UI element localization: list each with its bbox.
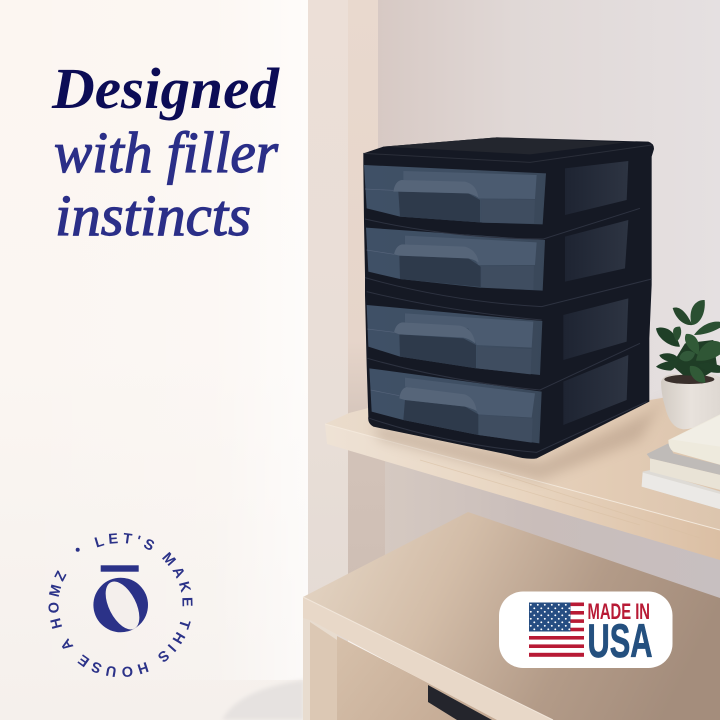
side window 2	[565, 220, 628, 282]
circular slogan: LET'S MAKE THIS HOUSE A HOMZ	[48, 532, 192, 677]
side window 3	[563, 298, 628, 360]
bottom book	[642, 470, 720, 509]
curtain base shape	[222, 680, 304, 720]
title line 2: with filler	[54, 120, 278, 185]
usa text: USA	[588, 614, 652, 667]
logo ring	[93, 578, 148, 632]
top book	[668, 414, 720, 465]
background: back wall	[378, 0, 720, 480]
title line 3: instincts	[55, 183, 251, 248]
logo bar	[101, 565, 139, 572]
desk front edge	[303, 597, 553, 720]
desk	[303, 512, 720, 720]
logo badge	[48, 532, 192, 677]
desk top surface	[303, 512, 720, 720]
drawer unit shadow	[372, 395, 666, 480]
drawer 2	[366, 228, 545, 291]
badge background	[499, 592, 672, 668]
side window 4	[563, 355, 628, 425]
drawer 1	[364, 165, 546, 224]
background: curtain fold left	[306, 0, 348, 720]
drawer rails	[365, 208, 652, 452]
plant pot	[661, 374, 720, 429]
desk inner cavity	[337, 636, 500, 720]
drawer 4	[369, 368, 542, 443]
plant leaves	[656, 300, 720, 383]
cabinet frame	[363, 137, 654, 459]
american flag	[529, 602, 584, 657]
shelf	[325, 388, 720, 560]
side window 1	[565, 161, 628, 215]
made in usa badge	[499, 592, 672, 668]
cabinet lid	[383, 137, 627, 154]
drawer handle	[428, 685, 492, 720]
made in text: MADE IN	[588, 599, 650, 624]
drawer 3	[367, 305, 542, 375]
middle book	[647, 443, 720, 475]
title	[51, 56, 280, 248]
title line 1: Designed	[51, 56, 280, 121]
background: curtain fold right	[340, 0, 385, 620]
background: wall below shelf	[385, 440, 720, 620]
plant and books	[642, 300, 720, 509]
slogan dot	[76, 548, 80, 552]
storage drawer unit	[363, 137, 654, 459]
background: white curtain	[0, 0, 308, 720]
